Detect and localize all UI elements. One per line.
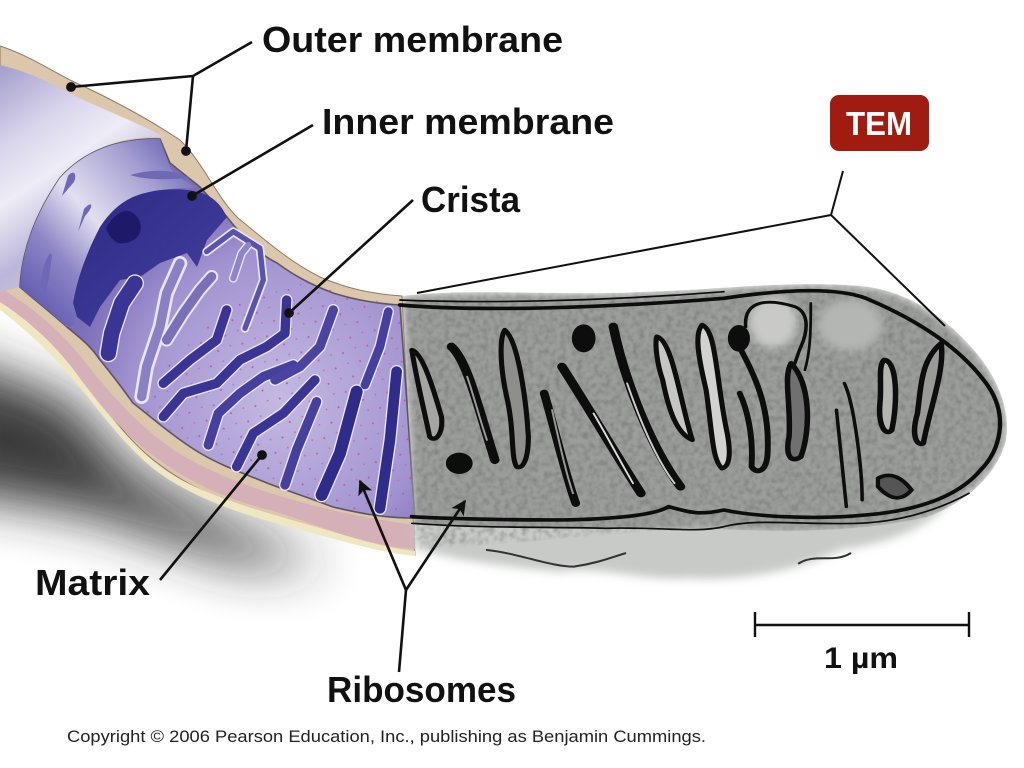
cristae folds in the cutaway (108, 232, 397, 508)
outer membrane wall (0, 46, 415, 555)
copyright line: Copyright © 2006 Pearson Education, Inc., publishing as Benjamin Cummings. (67, 727, 706, 746)
fold outlines (108, 232, 397, 508)
cut opening with matrix (20, 139, 415, 518)
membranes and cristae (400, 291, 1000, 567)
cream and pink lower wall (0, 288, 415, 549)
TEM micrograph (400, 284, 1007, 579)
inner membrane leader (188, 125, 313, 200)
micrograph grain (402, 284, 1007, 550)
scale bar: 1 µm (824, 642, 898, 675)
scale bar (755, 612, 969, 675)
crista leader (285, 200, 413, 317)
drop shadow under the drawing (0, 350, 330, 565)
label: Outer membrane: Outer membrane (262, 19, 563, 60)
label: Matrix: Matrix (35, 562, 150, 603)
bright lobes (749, 296, 797, 348)
inner ring surface (20, 139, 195, 327)
label: Inner membrane: Inner membrane (322, 101, 614, 142)
ribosome arrows (360, 481, 465, 672)
badge: TEM: TEM (846, 105, 912, 142)
ring folds (40, 171, 190, 295)
label: Ribosomes: Ribosomes (327, 669, 516, 710)
illustration: cutaway mitochondrion (0, 46, 415, 556)
label: Crista: Crista (421, 179, 521, 220)
cavity pocket (106, 211, 141, 243)
matrix leader (160, 451, 266, 580)
fold interiors (108, 232, 397, 508)
pale cytoplasm halo (413, 500, 950, 579)
TEM bracket lines (417, 171, 945, 326)
leader lines (67, 42, 945, 672)
outer tube surface (0, 65, 165, 292)
badge: TEM (830, 95, 929, 151)
dense granules (446, 324, 750, 474)
matrix ribosome dots (130, 280, 415, 518)
dark cavity (73, 189, 227, 327)
outer membrane leader (67, 42, 252, 155)
micrograph body (402, 284, 1007, 550)
